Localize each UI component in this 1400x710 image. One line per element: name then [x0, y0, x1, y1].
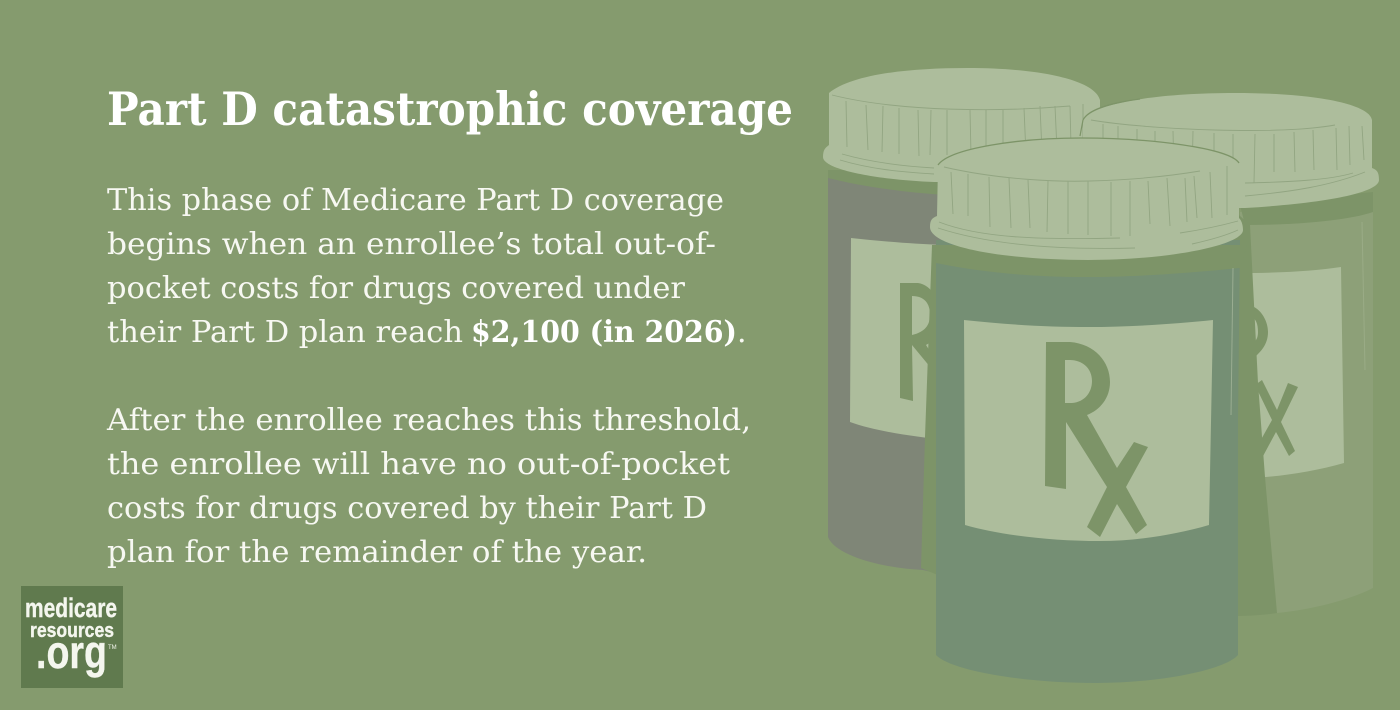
back left bottle [823, 68, 1100, 574]
paragraph: after threshold: plan for the remainder of the year. [107, 535, 647, 570]
paragraph: after threshold: After the enrollee reaches this threshold, [106, 403, 751, 438]
logo: medicareresources.org [21, 586, 123, 688]
logo: medicareresources.org: TM [108, 645, 117, 651]
logo: medicareresources.org: medicare [25, 593, 117, 623]
back right bottle [1080, 93, 1379, 613]
paragraph: phase threshold: . [737, 315, 747, 350]
paragraph: phase threshold: their Part D plan reach [107, 315, 463, 350]
paragraph: after threshold: costs for drugs covered by their Part D [107, 491, 707, 526]
paragraph: phase threshold: begins when an enrollee’s total out-of- [107, 227, 716, 262]
logo: medicareresources.org: .org [36, 626, 107, 678]
illustration: three prescription bottles [823, 68, 1379, 683]
Rx symbol [1045, 342, 1148, 537]
title: Part D catastrophic coverage [107, 82, 793, 136]
bottle cap [930, 138, 1243, 260]
paragraph: after threshold: the enrollee will have no out-of-pocket [107, 447, 730, 482]
paragraph: phase threshold [107, 183, 747, 350]
paragraph: phase threshold: pocket costs for drugs covered under [107, 271, 686, 306]
paragraph: after threshold [106, 403, 751, 570]
paragraph: phase threshold: This phase of Medicare Part D coverage [107, 183, 724, 218]
bottle body [936, 240, 1240, 683]
front bottle shadow [921, 207, 1277, 616]
bottle label [964, 320, 1213, 541]
front bottle [930, 138, 1247, 683]
paragraph: phase threshold: $2,100 (in 2026) [471, 315, 737, 350]
logo: medicareresources.org: resources [30, 620, 114, 642]
